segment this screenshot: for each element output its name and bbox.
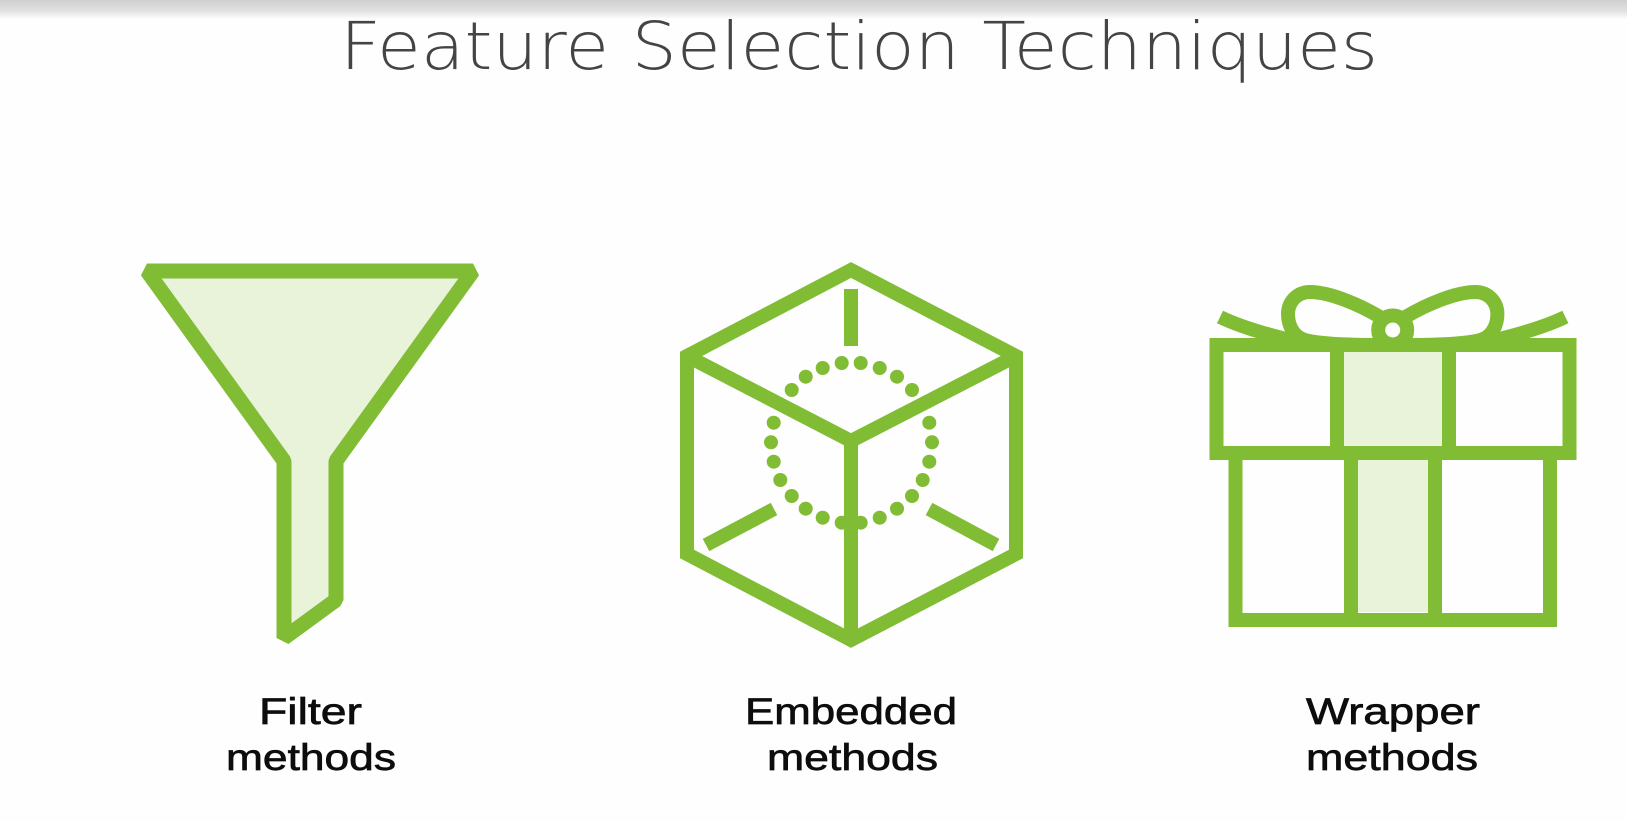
- label: filter methods: Filter: [259, 691, 362, 732]
- label: filter methods: [226, 691, 396, 778]
- box and lid: [1216, 345, 1570, 620]
- label: embedded methods: [745, 691, 957, 778]
- dotted circle: [764, 356, 939, 530]
- icon: funnel: [147, 271, 473, 638]
- icon: gift box: [1216, 292, 1570, 620]
- label: wrapper methods: [1306, 691, 1480, 778]
- top shadow band: [0, 0, 1627, 19]
- label: embedded methods: Embedded: [745, 691, 957, 732]
- cube frame: [687, 270, 1016, 640]
- label: filter methods: methods: [226, 737, 396, 778]
- label: wrapper methods: methods: [1306, 737, 1478, 778]
- panel: embedded methods: [687, 270, 1016, 778]
- icon: cube with dotted circle: [687, 270, 1016, 640]
- panel: wrapper methods: [1216, 292, 1570, 778]
- panel: filter methods: [147, 271, 473, 778]
- title: Feature Selection Techniques: [340, 8, 1378, 85]
- ribbon fills: [1344, 352, 1442, 612]
- bow: [1220, 292, 1565, 345]
- label: embedded methods: methods: [767, 737, 938, 778]
- label: wrapper methods: Wrapper: [1306, 691, 1480, 732]
